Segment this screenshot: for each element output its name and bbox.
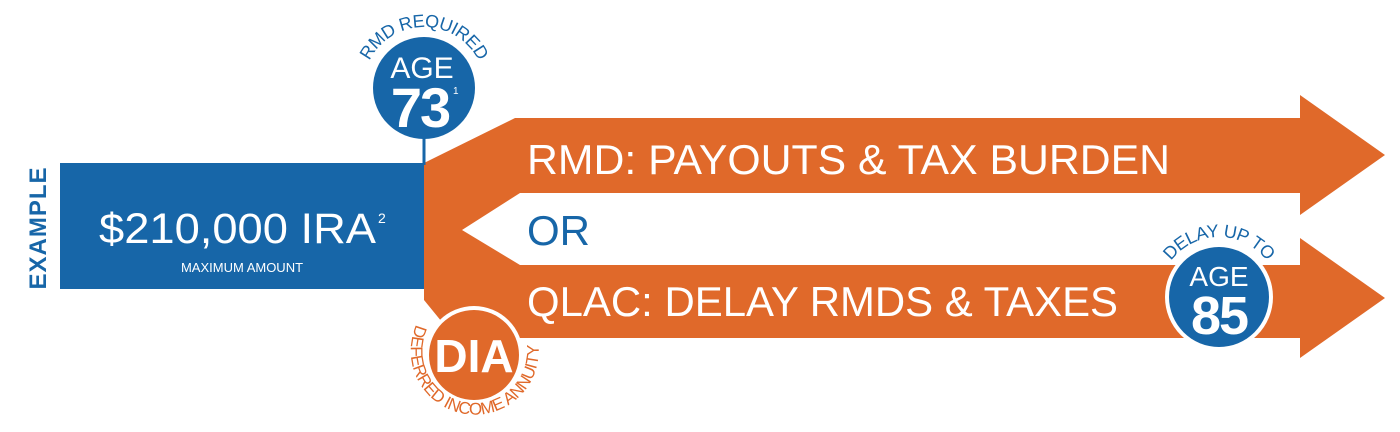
connector line — [422, 130, 426, 165]
badge: RMD required age 73: 1 — [453, 86, 459, 97]
badge: delay up to age 85 — [1162, 224, 1274, 347]
badge: delay up to age 85: DELAY UP TO — [1162, 224, 1274, 260]
badge: delay up to age 85: 85 — [1191, 286, 1248, 346]
badge: RMD required age 73: 73 — [391, 76, 450, 139]
RMD arrow text: RMD: PAYOUTS & TAX BURDEN — [527, 136, 1170, 183]
QLAC arrow text: QLAC: DELAY RMDS & TAXES — [527, 278, 1118, 325]
label: EXAMPLE: EXAMPLE — [25, 166, 52, 290]
badge: RMD required age 73 — [360, 14, 487, 139]
badge: DIA: DEFERRED INCOME ANNUITY — [410, 326, 539, 415]
orange double arrows — [424, 95, 1385, 358]
maximum amount caption: MAXIMUM AMOUNT — [181, 260, 303, 275]
badge: RMD required age 73: RMD REQUIRED — [360, 14, 487, 60]
blue IRA box — [60, 163, 424, 289]
badge: DIA: DIA — [434, 330, 514, 382]
badge: delay up to age 85: AGE — [1189, 261, 1249, 292]
OR text: OR — [527, 207, 590, 254]
IRA amount text: $210,000 IRA — [99, 205, 376, 253]
badge: RMD required age 73: AGE — [390, 52, 454, 85]
blue IRA box: 2 — [378, 210, 386, 226]
